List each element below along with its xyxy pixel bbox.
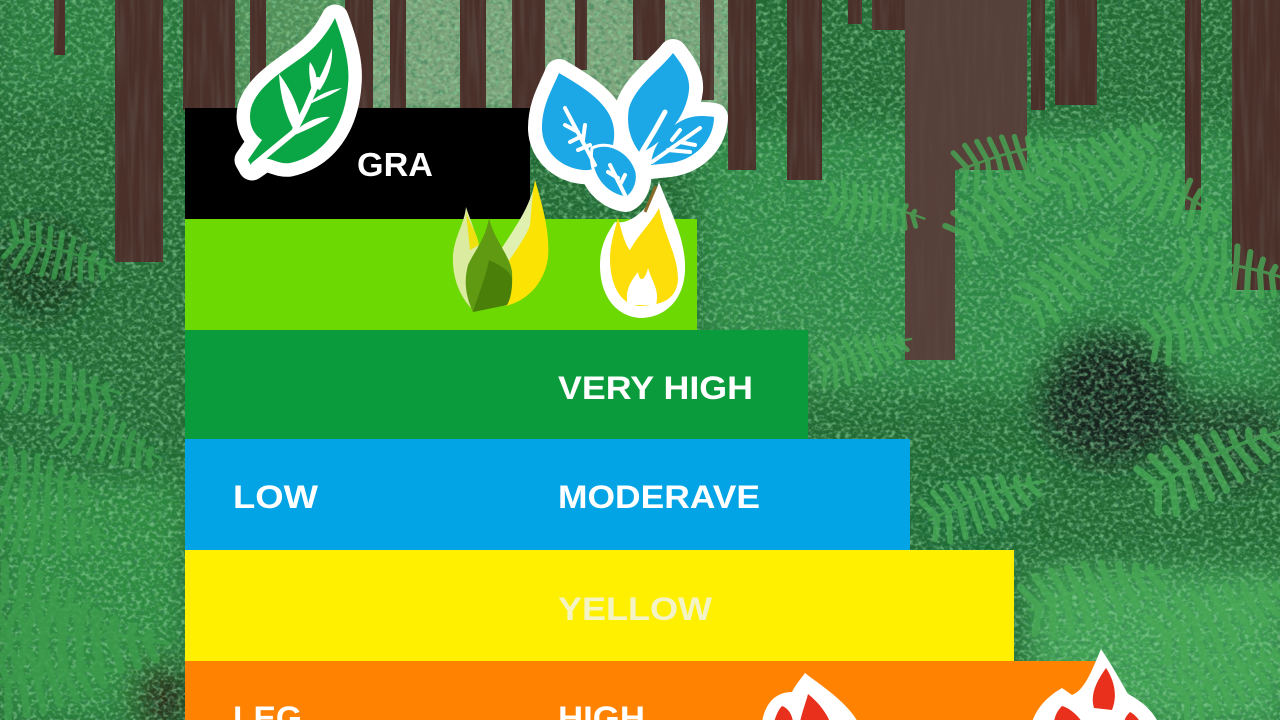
icon: green leaf sticker (248, 18, 348, 167)
pale light between the trunks (235, 0, 735, 110)
bar: yellow, YELLOW: YELLOW (558, 591, 713, 627)
bar: blue, LOW and MODERAVE: MODERAVE (558, 479, 760, 515)
bar: lime (185, 219, 697, 330)
tree trunks (54, 0, 1280, 360)
icon: green and yellow leaves (453, 180, 548, 312)
icon: left red flame sticker (762, 673, 858, 720)
icon: blue leaves cluster sticker (542, 53, 714, 198)
bar: black, GRA (185, 108, 530, 219)
bar: yellow, YELLOW (185, 550, 1014, 661)
icon: yellow flame sticker (600, 182, 685, 318)
bar: orange, LEG and HIGH (185, 661, 1096, 720)
white sticker backing (542, 53, 714, 198)
bar: green, VERY HIGH (185, 330, 808, 439)
fern fronds, right (811, 106, 1280, 720)
bar: blue, LOW and MODERAVE (185, 439, 910, 550)
bar: blue, LOW and MODERAVE: LOW (233, 479, 319, 515)
blue leaf shapes (542, 53, 714, 198)
fern fronds, left (0, 215, 171, 720)
white leaf veins (565, 108, 700, 195)
icon: right red flame sticker (1032, 649, 1158, 720)
rating staircase bars (185, 108, 1096, 720)
bar: black, GRA: GRA (357, 146, 433, 183)
bar: green, VERY HIGH: VERY HIGH (558, 370, 753, 406)
